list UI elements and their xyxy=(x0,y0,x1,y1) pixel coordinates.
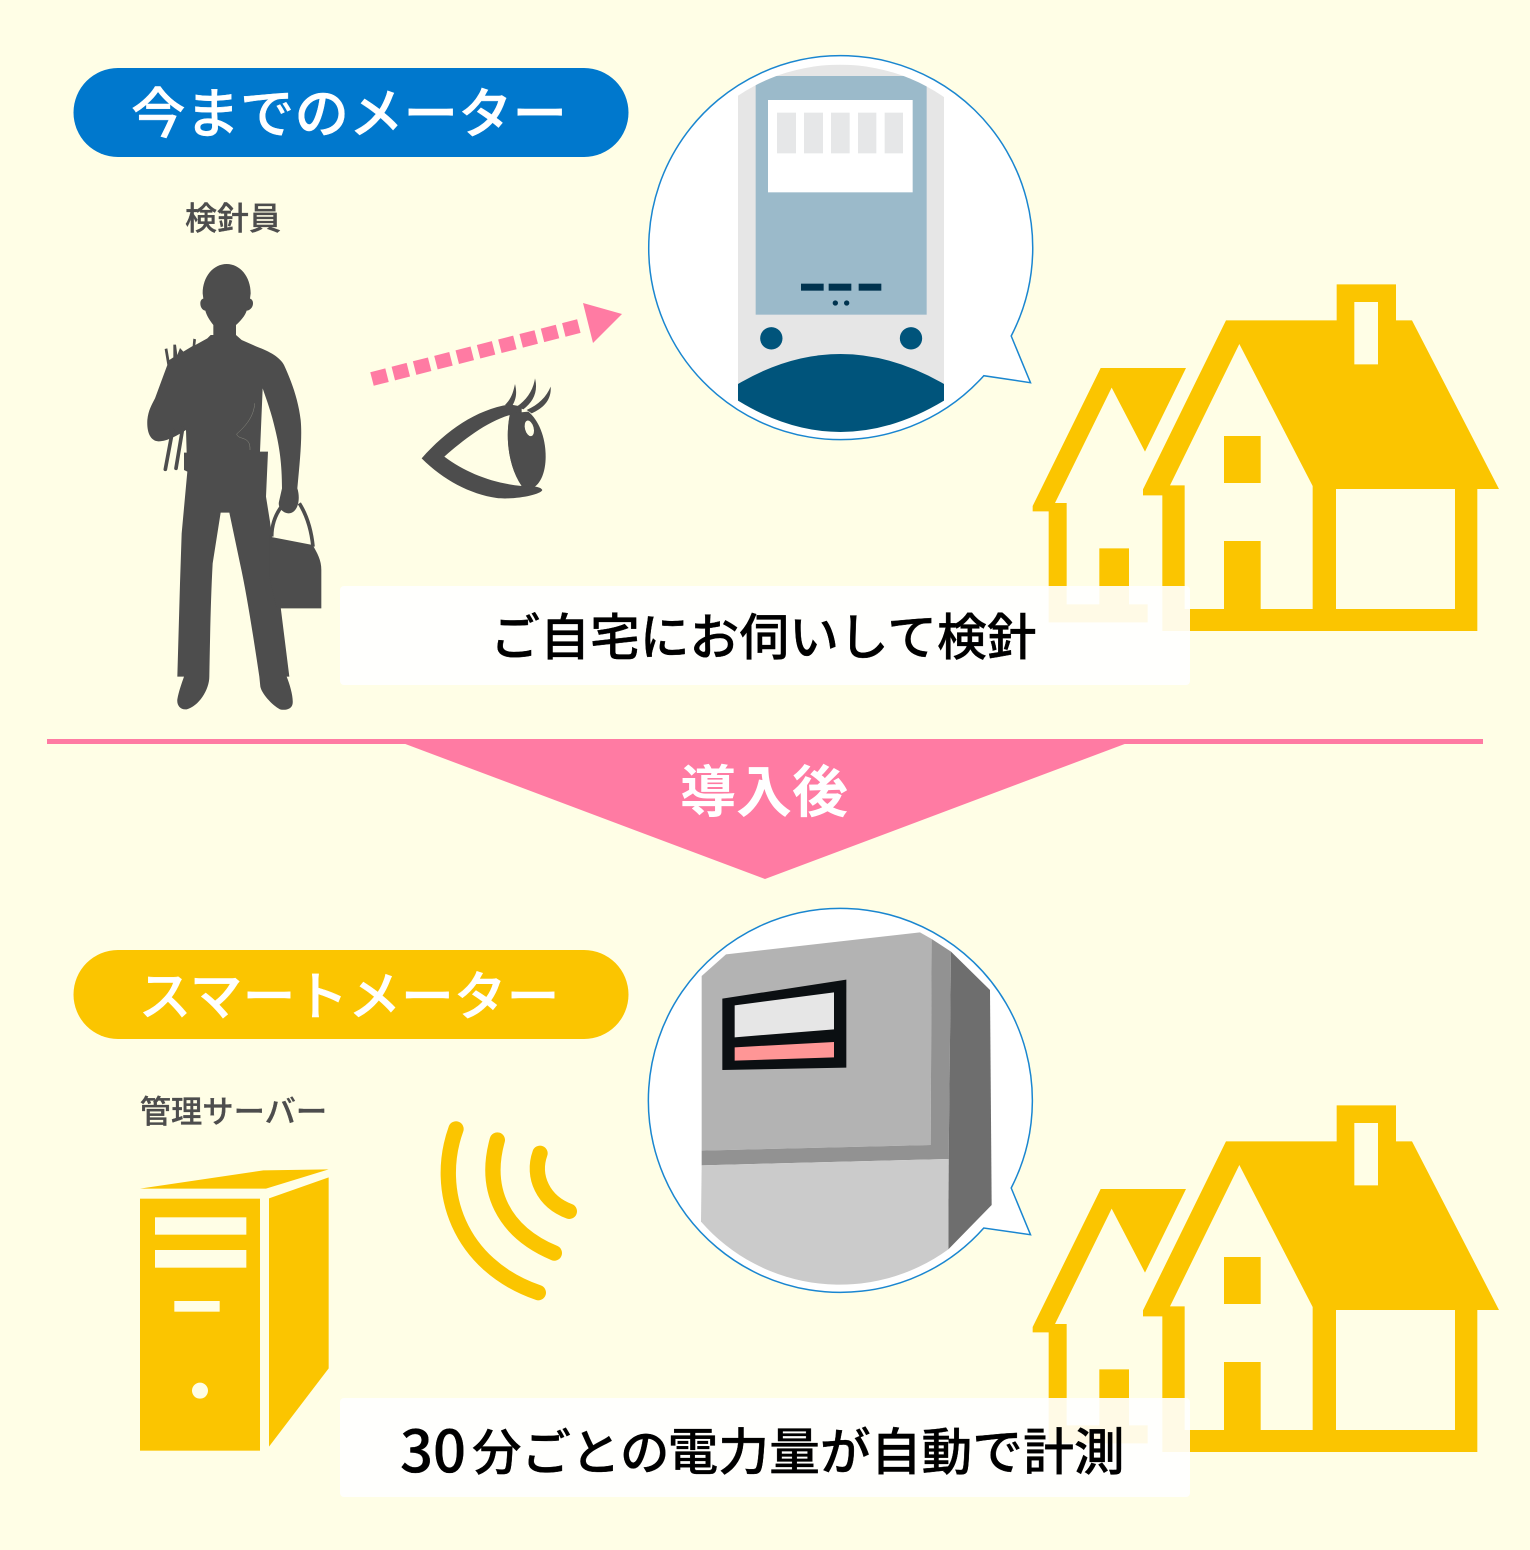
section heading: conventional meter xyxy=(74,68,628,157)
caption: smart meter xyxy=(340,1398,1190,1497)
caption: smart meter: 30 xyxy=(400,1405,466,1489)
icon: meter reader silhouette xyxy=(147,264,321,710)
callout bubble: smart meter xyxy=(648,908,1032,1292)
caption: smart meter: 電力量が自動で計測 xyxy=(668,1411,1125,1485)
illustration: analog meter xyxy=(738,65,944,432)
section heading: smart meter xyxy=(74,950,628,1039)
label: meter reader: 検針員 xyxy=(185,200,281,236)
caption: conventional meter: ご自宅にお伺いして検針 xyxy=(490,610,1037,666)
icon: wireless signal waves xyxy=(448,1129,569,1293)
caption: conventional meter xyxy=(340,586,1190,685)
divider arrow: after introduction: 導入後 xyxy=(680,761,848,824)
icon: houses, smart meter section xyxy=(1033,1105,1499,1452)
divider arrow: after introduction xyxy=(47,739,1483,879)
illustration: smart meter xyxy=(701,932,992,1285)
section heading: smart meter: スマートメーター xyxy=(139,968,559,1027)
section heading: conventional meter: 今までのメーター xyxy=(131,84,567,145)
icon: eye xyxy=(422,378,551,498)
arrow: line of sight xyxy=(372,303,622,379)
label: management server: 管理サーバー xyxy=(140,1094,327,1130)
callout bubble: conventional meter xyxy=(649,56,1033,440)
icon: server tower xyxy=(140,1169,329,1451)
caption: smart meter: 分ごとの xyxy=(472,1414,670,1485)
icon: houses, conventional section xyxy=(1033,284,1499,631)
